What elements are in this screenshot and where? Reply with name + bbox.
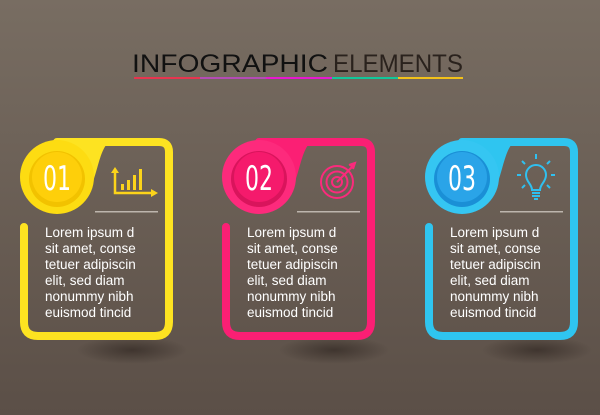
text block 03: euismod tincid	[450, 305, 536, 320]
number 01: 01	[43, 159, 71, 198]
number 02: 02	[245, 159, 273, 198]
text block 03	[450, 225, 541, 320]
text block 01: Lorem ipsum d	[45, 225, 134, 240]
panel: card 03	[425, 139, 574, 336]
panel: card 02	[222, 139, 371, 336]
text block 01	[45, 225, 136, 320]
text block 02: sit amet, conse	[247, 241, 338, 256]
text block 01: tetuer adipiscin	[45, 257, 136, 272]
text block 01: nonummy nibh	[45, 289, 134, 304]
text block 02: Lorem ipsum d	[247, 225, 336, 240]
shadows	[77, 336, 592, 364]
icon: light bulb	[517, 154, 555, 199]
number 03: 03	[448, 159, 476, 198]
title: INFOGRAPHIC	[132, 50, 328, 78]
icon: bar chart	[111, 167, 158, 197]
text block 01: sit amet, conse	[45, 241, 136, 256]
text block 03: nonummy nibh	[450, 289, 539, 304]
text block 02	[247, 225, 338, 320]
text block 03: tetuer adipiscin	[450, 257, 541, 272]
text block 03: elit, sed diam	[450, 273, 530, 288]
icon: target	[321, 163, 355, 198]
text block 02: tetuer adipiscin	[247, 257, 338, 272]
panel: card 01	[20, 139, 169, 336]
text block 01: elit, sed diam	[45, 273, 125, 288]
text block 01: euismod tincid	[45, 305, 131, 320]
text block 03: sit amet, conse	[450, 241, 541, 256]
title	[132, 50, 463, 79]
title: ELEMENTS	[333, 50, 463, 78]
text block 02: nonummy nibh	[247, 289, 336, 304]
text block 02: euismod tincid	[247, 305, 333, 320]
text block 02: elit, sed diam	[247, 273, 327, 288]
text block 03: Lorem ipsum d	[450, 225, 539, 240]
